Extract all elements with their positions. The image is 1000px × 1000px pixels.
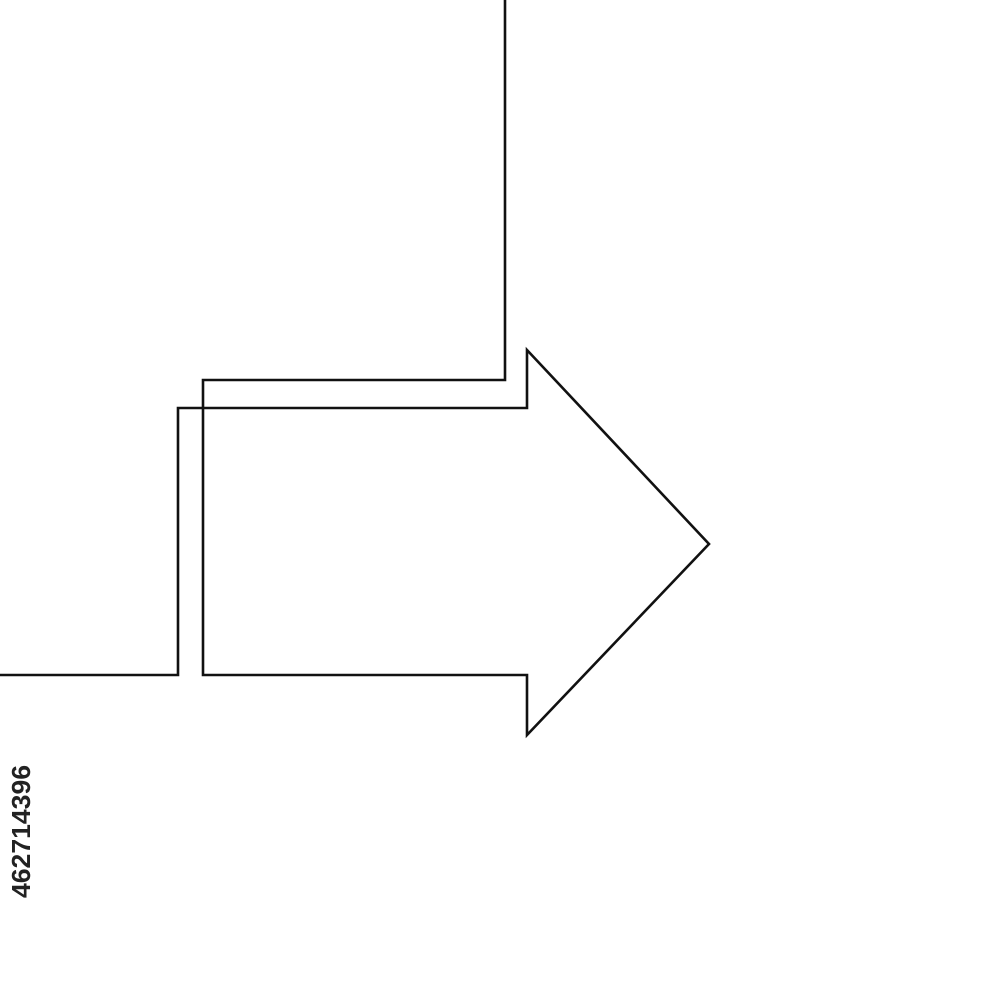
arrow: continuous line forming right arrow [0,0,709,735]
stock id text: 462714396 [6,765,36,898]
